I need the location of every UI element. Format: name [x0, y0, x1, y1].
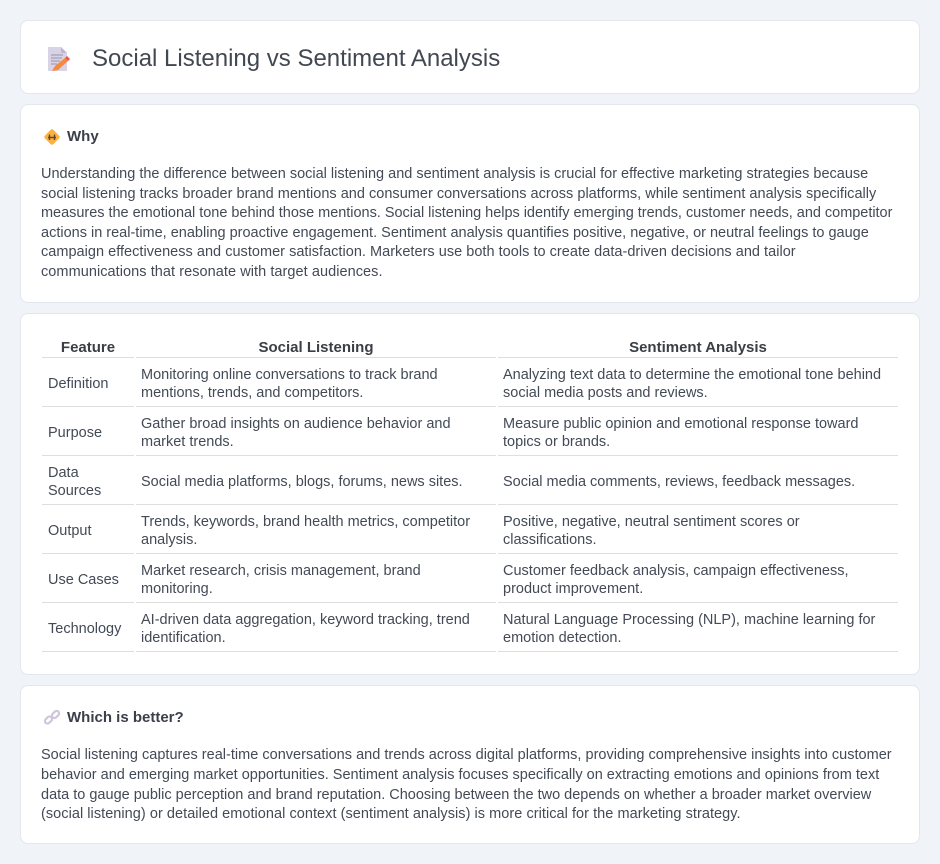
icon: link — [44, 710, 60, 725]
row: technology: AI-driven data aggregation, keyword tracking, trend — [141, 612, 470, 628]
table header row: Social Listening — [258, 338, 374, 356]
row: purpose: topics or brands. — [503, 434, 610, 450]
panel: which is better — [20, 685, 920, 844]
row: output: Trends, keywords, brand health metrics, competitor — [141, 514, 470, 530]
row: data sources: Social media comments, reviews, feedback messages. — [503, 474, 855, 490]
row: output — [48, 514, 800, 548]
row: purpose: Measure public opinion and emotional response toward — [503, 416, 858, 432]
row: definition: Definition — [48, 376, 108, 392]
row: output: Positive, negative, neutral sentiment scores or — [503, 514, 800, 530]
row: technology: identification. — [141, 630, 226, 646]
row: data sources — [48, 465, 855, 499]
which is better text block: (social listening) or detailed emotional context (sentiment analysis) is more critical for the marketing strategy. — [41, 806, 741, 822]
row: use cases — [48, 563, 848, 597]
row: data sources: Sources — [48, 483, 101, 499]
row: use cases: Market research, crisis management, brand — [141, 563, 421, 579]
which is better text block: Social listening captures real-time conversations and trends across digital platforms, providing comprehensive insights into customer — [41, 747, 892, 763]
row: technology — [48, 612, 876, 646]
title: Social Listening vs Sentiment Analysis — [92, 45, 500, 72]
row: purpose: Gather broad insights on audience behavior and — [141, 416, 451, 432]
why text block: campaign effectiveness and customer satisfaction. Marketers use both tools to create data-driven decisions and tailor — [41, 244, 796, 260]
why text block: actions in real-time, enabling proactive engagement. Sentiment analysis quantifies positive, negative, or neutral feelings to gauge — [41, 225, 869, 241]
why text block: Understanding the difference between social listening and sentiment analysis is crucial for effective marketing strategies because — [41, 166, 868, 182]
why text block: communications that resonate with target audiences. — [41, 264, 383, 280]
which is better text block: data to gauge public perception and brand reputation. Choosing between the two depends on whether a broader market overview — [41, 787, 871, 803]
row: purpose: Purpose — [48, 425, 102, 441]
row: technology: Technology — [48, 621, 121, 637]
why text block — [41, 166, 892, 280]
row: use cases: product improvement. — [503, 581, 643, 597]
row: definition — [48, 367, 881, 401]
panel: why — [20, 104, 920, 303]
why text block: social listening tracks broader brand mentions and consumer conversations across platforms, while sentiment analysis specifically — [41, 186, 876, 202]
panel: title card — [20, 20, 920, 94]
row: definition: social media posts and reviews. — [503, 385, 708, 401]
row: data sources: Data — [48, 465, 79, 481]
why text block: measures the emotional tone behind those mentions. Social listening helps identify emerging trends, customer needs, and competitor — [41, 205, 892, 221]
row: technology: emotion detection. — [503, 630, 622, 646]
row: output: Output — [48, 523, 92, 539]
table header row — [61, 338, 767, 356]
row: output: classifications. — [503, 532, 596, 548]
row: use cases: Use Cases — [48, 572, 119, 588]
heading: which is better: Which is better? — [67, 709, 184, 726]
heading: why: Why — [67, 128, 99, 145]
row: technology: Natural Language Processing (NLP), machine learning for — [503, 612, 875, 628]
icon: warning diamond — [44, 129, 60, 145]
row: purpose: market trends. — [141, 434, 234, 450]
row: use cases: monitoring. — [141, 581, 213, 597]
row: definition: mentions, trends, and competitors. — [141, 385, 363, 401]
row: output: analysis. — [141, 532, 197, 548]
panel: comparison table — [20, 313, 920, 675]
icon: memo with pencil — [48, 47, 70, 71]
row: purpose — [48, 416, 858, 450]
table header row: Sentiment Analysis — [629, 338, 767, 356]
which is better text block: behavior and emerging market opportunities. Sentiment analysis focuses specifically on extracting emotions and opinions from text — [41, 767, 879, 783]
row: definition: Monitoring online conversations to track brand — [141, 367, 438, 383]
which is better text block — [41, 747, 892, 822]
row: data sources: Social media platforms, blogs, forums, news sites. — [141, 474, 463, 490]
row: definition: Analyzing text data to determine the emotional tone behind — [503, 367, 881, 383]
table header row: Feature — [61, 338, 115, 356]
row: use cases: Customer feedback analysis, campaign effectiveness, — [503, 563, 848, 579]
